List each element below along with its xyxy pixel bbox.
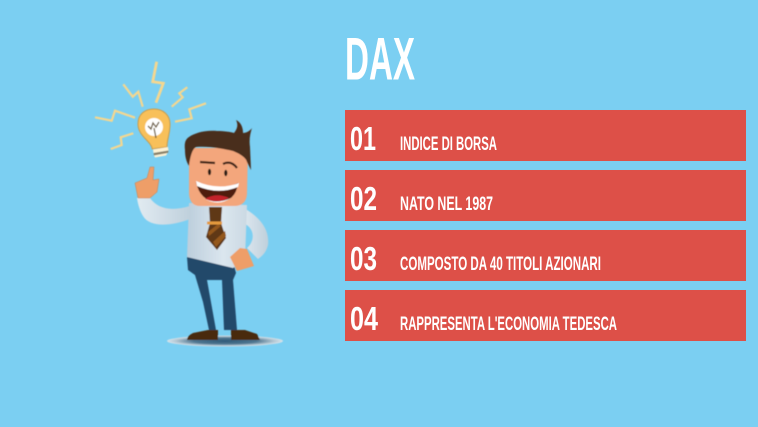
icon: light bulb (138, 109, 170, 158)
panel: item 03 (345, 230, 746, 281)
label: composto da 40 titoli azionari: COMPOSTO DA 40 TITOLI AZIONARI (400, 254, 601, 275)
label: nato nel 1987: NATO NEL 1987 (400, 194, 493, 215)
pointing arm sleeve (137, 198, 190, 225)
pointing hand (135, 167, 159, 198)
panel: item 02 (345, 170, 746, 221)
icon: lightning bolts (95, 62, 206, 149)
number 02: 02 (350, 180, 377, 217)
label: rappresenta l'economia tedesca: RAPPRESENTA L'ECONOMIA TEDESCA (400, 314, 617, 335)
resting hand (230, 248, 254, 271)
number 04: 04 (350, 300, 378, 337)
shoes (187, 330, 260, 340)
pants (187, 257, 237, 330)
eyes and eyebrows (200, 162, 237, 176)
title: DAX (345, 26, 415, 92)
panel: item 04 (345, 290, 746, 341)
right arm sleeve (240, 206, 268, 259)
mouth (196, 181, 239, 202)
shirt torso (187, 203, 247, 268)
number 01: 01 (350, 120, 376, 157)
label: indice di borsa: INDICE DI BORSA (400, 134, 497, 155)
tie (206, 207, 226, 250)
illustration: businessman with idea (95, 62, 283, 346)
panel: item 01 (345, 110, 746, 161)
number 03: 03 (350, 240, 377, 277)
head (189, 148, 248, 206)
shadow under feet (167, 336, 283, 346)
hair (185, 120, 252, 170)
